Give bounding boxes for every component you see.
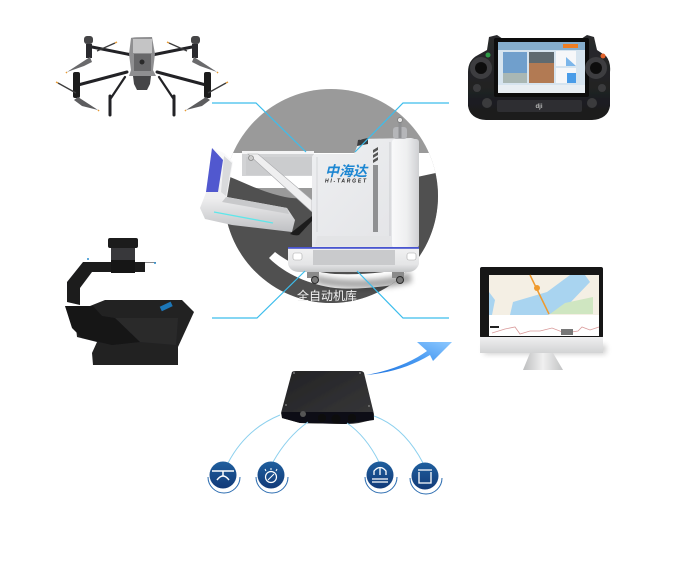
control box [281,371,374,424]
logo: HI-TARGET [325,178,367,184]
camera lens [87,238,156,273]
remote controller [468,35,610,120]
elevation chart [489,315,599,336]
dji mark: dji [536,104,543,110]
gripper [200,148,312,235]
icon: water vessel [365,462,397,493]
main body [312,118,419,248]
monitor bezel [480,267,603,338]
gimbal arm [67,262,145,305]
logo: 中海达 [325,163,369,179]
controller screen [494,38,589,97]
background disc with swoosh [220,89,445,310]
monitor shadow [484,345,606,354]
connector lines [212,103,449,318]
icon: camera sensor [256,462,288,493]
gimbal camera [65,238,194,365]
base [288,247,419,272]
map [489,275,599,315]
icon: drone [208,462,240,493]
gimbal base [75,300,194,365]
hangar machine [200,118,419,288]
monitor stand [523,353,563,370]
caption: hangar name: 全自动机库 [297,288,357,303]
motors and propellers [56,36,228,111]
link curves [228,415,423,463]
drone payload [133,76,151,90]
horizontal arm [242,151,314,212]
machine shadow [312,272,412,288]
wheels [307,272,404,284]
infographic: automatic drone hangar system [56,35,610,494]
monitor chin [480,337,603,353]
joysticks [470,52,607,112]
icon: hangar [410,462,442,494]
drone arms [78,47,206,115]
monitor [480,267,606,370]
drone [56,36,228,115]
drone body [129,37,156,76]
controller shell [468,35,610,120]
beacon [393,118,407,139]
data arrow [366,342,452,375]
